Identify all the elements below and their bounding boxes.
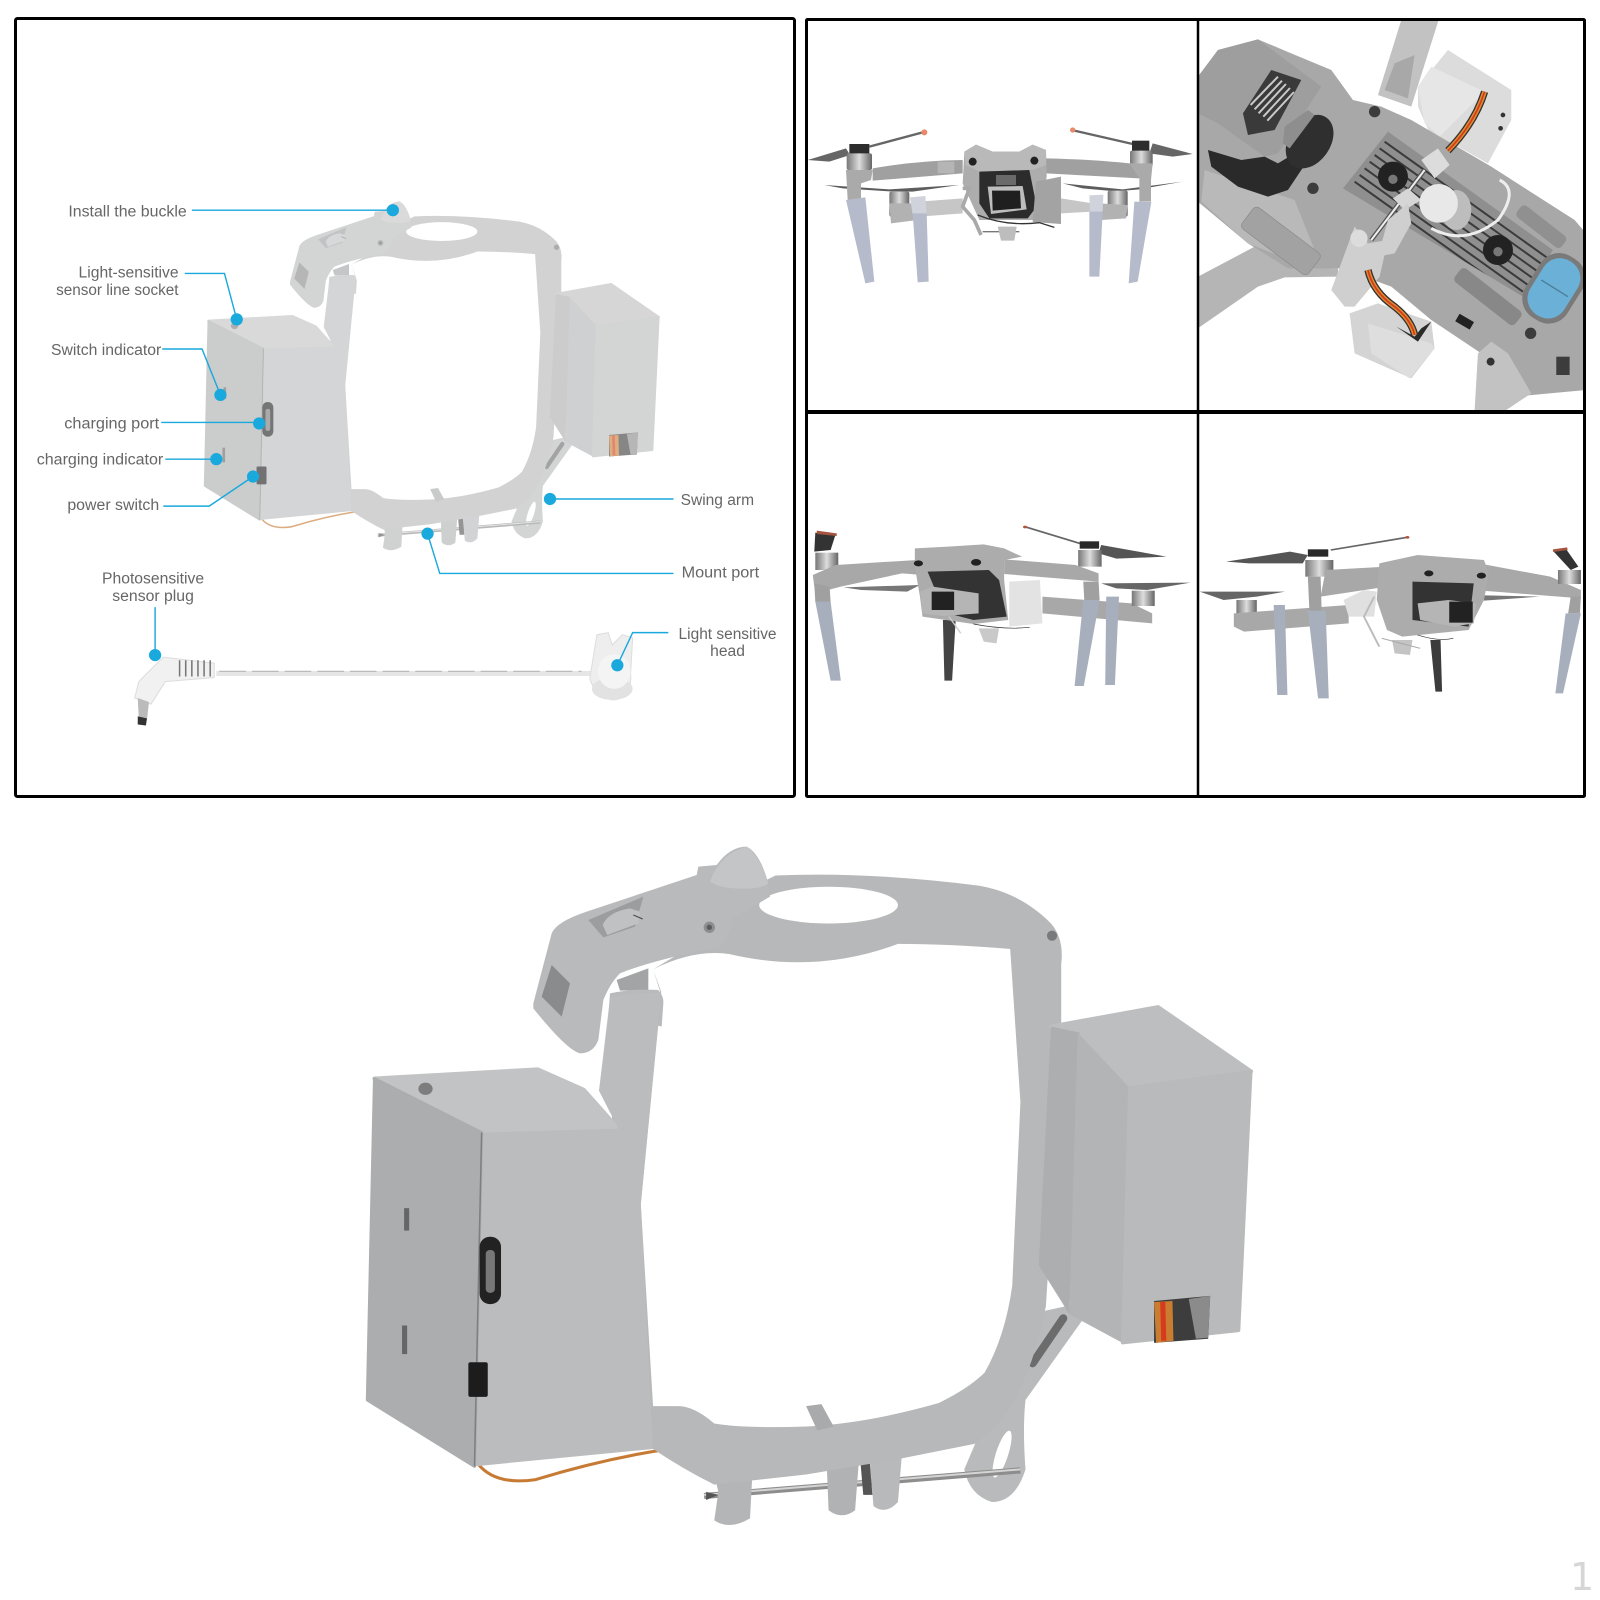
- callout: light-sensitive sensor line socket: sensor line socket: [56, 282, 179, 299]
- photo: drone front view: [808, 127, 1193, 283]
- callout: photosensitive sensor plug: Photosensitive: [102, 571, 204, 588]
- photo: drone left three-quarter view: [813, 526, 1190, 686]
- callout: swing arm: Swing arm: [681, 492, 754, 509]
- callout: charging indicator: [37, 451, 222, 468]
- photo: drone underside close-up: [1198, 20, 1594, 410]
- callout: charging indicator: charging indicator: [37, 451, 163, 468]
- callout: light sensitive head: head: [710, 643, 745, 660]
- callout: light-sensitive sensor line socket: [56, 265, 243, 326]
- callout: switch indicator: [51, 342, 227, 401]
- callout: power switch: power switch: [67, 497, 159, 514]
- callout: switch indicator: Switch indicator: [51, 342, 161, 359]
- callout: charging port: [64, 416, 265, 433]
- callout: install the buckle: Install the buckle: [68, 203, 187, 220]
- panel: drone photo grid frame: [806, 19, 1585, 797]
- callout: light sensitive head: [611, 626, 777, 671]
- callout: photosensitive sensor plug: sensor plug: [112, 588, 194, 605]
- photo: drone right three-quarter view: [1200, 536, 1581, 698]
- callout: mount port: [421, 528, 760, 582]
- product photo: large bracket: [367, 847, 1251, 1525]
- callout: power switch: [67, 470, 259, 514]
- callout: photosensitive sensor plug: [102, 571, 204, 661]
- panel: annotated diagram frame: [16, 18, 794, 796]
- callout: swing arm: [544, 492, 754, 509]
- callout: mount port: Mount port: [682, 565, 760, 582]
- callout: light sensitive head: Light sensitive: [679, 626, 777, 643]
- page number: 1: [1570, 1555, 1594, 1599]
- annotated cable: photosensitive sensor: [135, 633, 633, 726]
- callout: charging port: charging port: [64, 416, 160, 433]
- callout: install the buckle: [68, 203, 399, 220]
- callout: light-sensitive sensor line socket: Light-sensitive: [79, 265, 179, 282]
- product diagram: small bracket: [205, 202, 659, 550]
